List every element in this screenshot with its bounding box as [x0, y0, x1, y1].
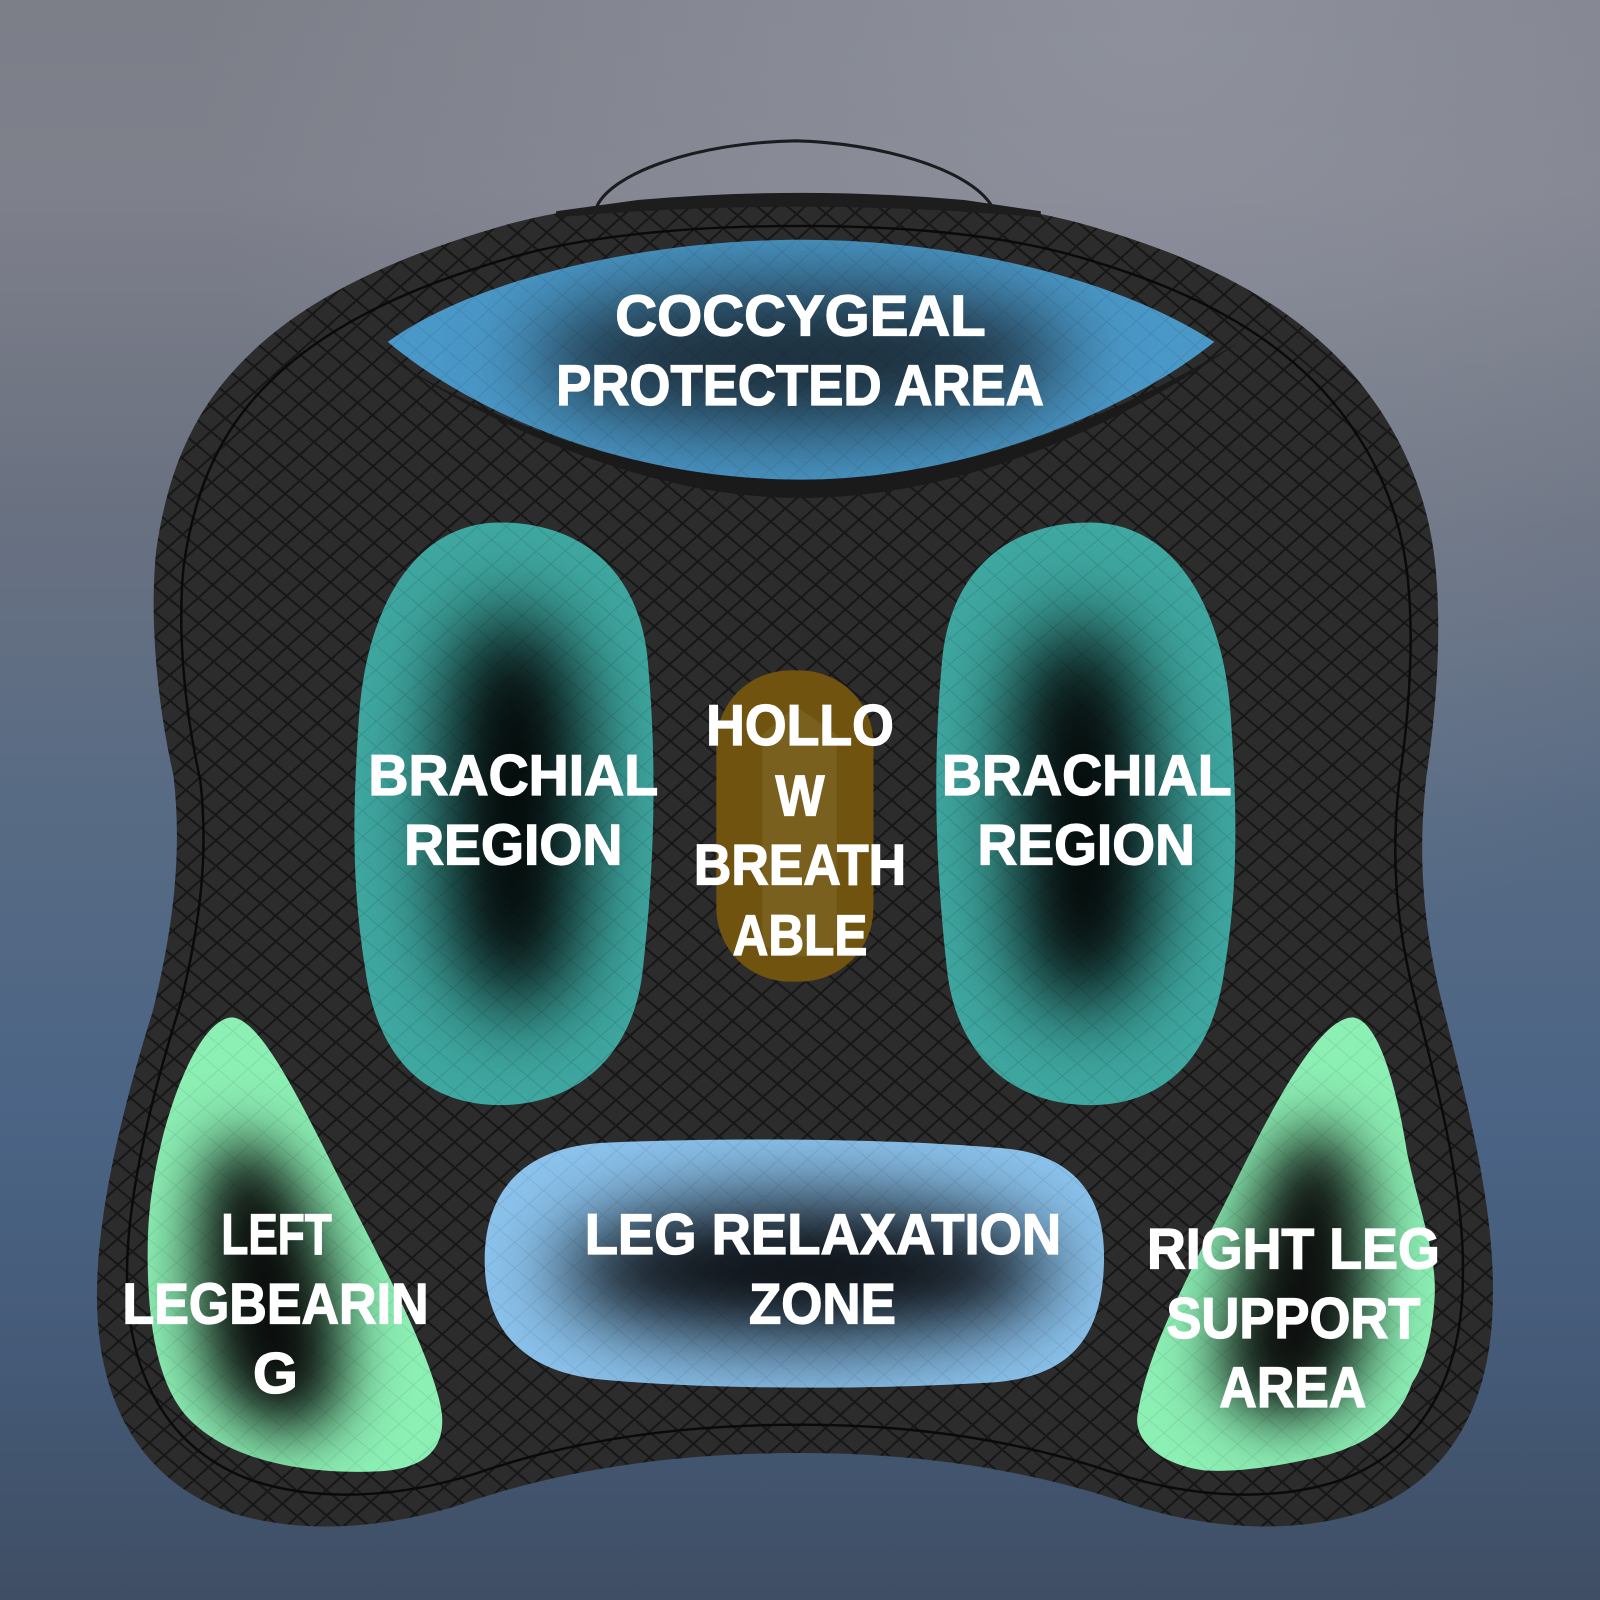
label: left leg bearing: LEFT: [221, 1203, 332, 1267]
label: right leg support area: RIGHT LEG: [1147, 1217, 1440, 1281]
label: hollow breathable: [694, 694, 906, 968]
panel: left brachial region: [354, 522, 654, 1105]
label: leg relaxation zone: ZONE: [749, 1272, 896, 1336]
label: left leg bearing: LEGBEARIN: [122, 1272, 429, 1336]
label: hollow breathable: BREATH: [694, 834, 906, 898]
label: right brachial region: REGION: [978, 813, 1195, 877]
label: left brachial region: REGION: [404, 813, 622, 877]
label: right leg support area: SUPPORT: [1166, 1287, 1420, 1351]
label: left brachial region: [368, 744, 658, 877]
label: right leg support area: AREA: [1219, 1356, 1366, 1420]
panel: right brachial region: [936, 522, 1235, 1105]
label: right leg support area: [1147, 1217, 1440, 1420]
label: hollow breathable: ABLE: [733, 904, 867, 968]
panel: seat cushion: [97, 193, 1493, 1526]
label: coccygeal: COCCYGEAL: [615, 285, 986, 349]
panel: right leg support area: [1137, 1017, 1435, 1471]
label: protected area: PROTECTED AREA: [556, 354, 1044, 418]
panel: leg relaxation zone: [485, 1140, 1104, 1388]
panel: left leg bearing: [148, 1017, 442, 1472]
label: left leg bearing: G: [253, 1342, 298, 1406]
panel: coccygeal protected area: [363, 240, 1239, 498]
label: right brachial region: [942, 744, 1232, 877]
panel: hollow breathable: [716, 670, 873, 982]
label: hollow breathable: HOLLO: [706, 694, 894, 758]
label: leg relaxation zone: LEG RELAXATION: [585, 1203, 1061, 1267]
label: left brachial region: BRACHIAL: [368, 744, 658, 808]
label: leg relaxation zone: [585, 1203, 1061, 1336]
label: right brachial region: BRACHIAL: [942, 744, 1232, 808]
label: hollow breathable: W: [776, 764, 825, 828]
icon: carry handle: [597, 141, 992, 206]
label: left leg bearing: [122, 1203, 429, 1406]
